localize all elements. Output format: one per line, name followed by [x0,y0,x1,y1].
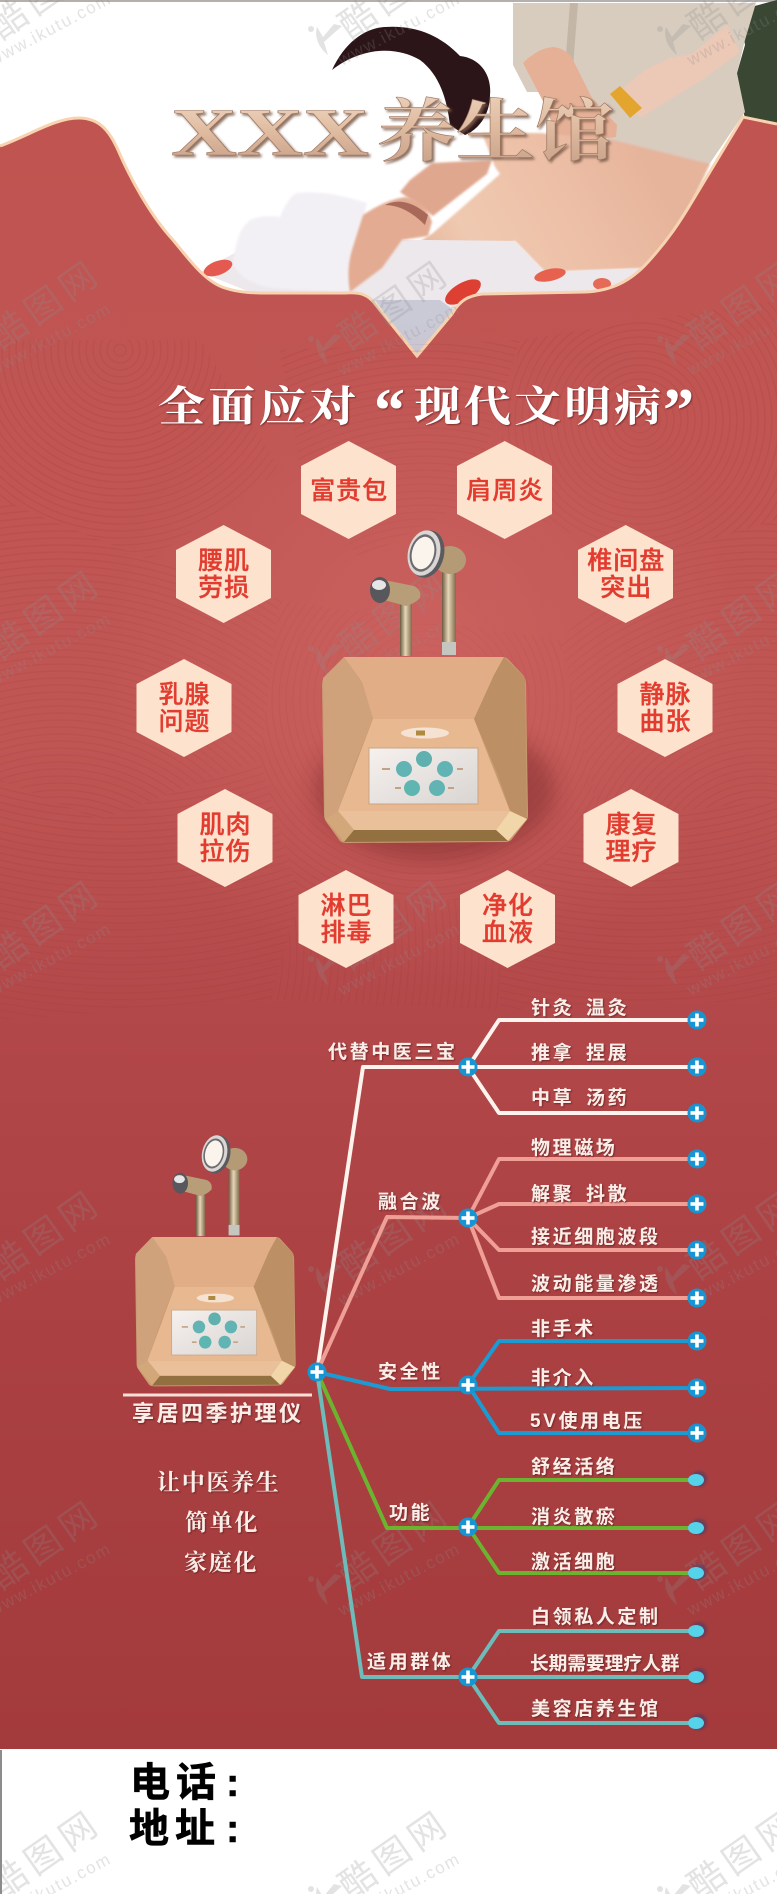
petals [202,256,234,280]
tree: labels: 消炎散瘀 [531,1505,617,1528]
towel [233,192,367,292]
hexagon: 静脉曲张: 曲张 [639,708,692,736]
wave edge stroke [0,117,777,356]
back and shoulder [350,133,710,297]
tree: labels: 波动能量渗透 [531,1272,661,1295]
tree: branch lines [317,1020,697,1723]
tree: labels: 适用群体 [367,1651,453,1673]
hexagon: 净化血液 [460,870,555,968]
oil bottle [610,86,642,118]
tree: labels: 推拿 [531,1043,574,1064]
hexagon: 静脉曲张 [618,659,712,757]
tree: labels: 白领私人定制 [531,1605,661,1628]
tree: labels: 代替中医三宝 [328,1040,458,1063]
hexagon: 静脉曲张: 静脉 [639,681,692,709]
tree: labels: 温灸 [586,997,629,1019]
branch: 安全性 [317,1341,697,1433]
hexagon: 富贵包: 富贵包 [310,477,388,505]
tree: labels: 中草 [531,1088,574,1109]
product caption: 享居四季护理仪 [132,1401,304,1426]
hexagon: 椎间盘突出: 突出 [600,574,652,602]
therapist left arm [523,47,617,142]
hexagon: 乳腺问题: 问题 [158,708,211,736]
tree: labels: 美容店养生馆 [531,1697,661,1720]
heading: ” [663,377,694,445]
top edge line [0,0,777,2]
title: XXX养生馆 [171,78,614,175]
therapist right arm and hand [618,25,740,117]
hexagon: 康复理疗: 理疗 [605,838,658,866]
hexagon: 淋巴排毒: 淋巴 [320,892,373,920]
leaf line pattern [0,300,777,1020]
therapist clothing [513,3,756,166]
sheet [200,240,650,360]
tree: labels [328,997,680,1720]
heading [158,373,694,445]
hexagon: 腰肌劳损 [176,525,271,623]
page edge line [0,1750,2,1894]
tree: labels: 捏展 [586,1042,629,1064]
footer contact: 地址: [129,1807,239,1851]
slogan: 让中医养生 [157,1464,280,1497]
tree: labels: 汤药 [586,1086,629,1109]
hexagon: 椎间盘突出: 椎间盘 [587,547,665,575]
forearm and fist [348,197,432,292]
tree: labels: 解聚 [531,1184,574,1205]
tree: labels: 物理磁场 [531,1137,617,1159]
tree: labels: 舒经活络 [531,1455,617,1478]
tree: labels: 非手术 [531,1318,596,1340]
heading: 全面应对 [158,373,356,433]
hexagon: 净化血液: 血液 [482,919,534,947]
tree: nodes [308,1010,707,1730]
tree: labels: 安全性 [378,1360,443,1383]
photo: massage scene [0,0,777,360]
branch: 适用群体 [317,1372,697,1723]
product caption [123,1394,312,1426]
hexagon: 康复理疗 [584,789,678,887]
footer contact [129,1761,239,1851]
title: XXX养生馆: XXX [171,94,369,170]
device: small product [135,1132,296,1386]
hexagon: 肩周炎 [457,441,552,539]
plant [735,0,777,125]
hexagon: 净化血液: 净化 [482,892,534,920]
tree: labels: 功能 [389,1502,432,1524]
tree: labels: 长期需要理疗人群 [530,1653,680,1674]
tree: labels: 非介入 [531,1367,596,1389]
tree: labels: 5V使用电压 [530,1410,645,1432]
footer contact: 电话: [130,1761,239,1805]
slogan: 家庭化 [184,1544,258,1577]
hexagon: 淋巴排毒 [298,870,394,968]
slogan: 简单化 [185,1504,259,1537]
hexagon: 肌肉拉伤: 拉伤 [199,838,252,866]
device: large product [315,527,555,860]
hexagon: 肌肉拉伤 [178,789,272,887]
heading: 现代文明病 [414,373,661,433]
hexagon: 腰肌劳损: 劳损 [198,574,250,602]
hexagon: 腰肌劳损: 腰肌 [198,547,250,575]
device shadow [315,720,555,860]
hexagon: 乳腺问题: 乳腺 [158,681,211,709]
hexagon: 乳腺问题 [136,659,232,757]
title: XXX养生馆: 养生馆 [377,78,614,175]
hexagon: 肩周炎: 肩周炎 [466,477,544,505]
tree: labels: 抖散 [586,1183,629,1205]
tree: labels: 融合波 [378,1191,443,1213]
hexagon: 康复理疗: 康复 [605,811,658,839]
branch: 功能 [317,1372,697,1573]
heading: “ [374,377,405,445]
hair [332,27,490,135]
neck [400,160,492,216]
tree: labels: 接近细胞波段 [531,1225,661,1248]
hexagon: 椎间盘突出 [578,525,673,623]
branch: 代替中医三宝 [317,1020,697,1372]
device body and handles [322,527,528,843]
slogan [157,1464,280,1577]
tree: labels: 针灸 [531,998,574,1019]
hexagon: 富贵包 [301,441,396,539]
hexagon: 肌肉拉伤: 肌肉 [199,811,252,839]
hexagon: 淋巴排毒: 排毒 [320,919,373,947]
branch: 融合波 [317,1159,697,1372]
tree: labels: 激活细胞 [531,1551,617,1573]
